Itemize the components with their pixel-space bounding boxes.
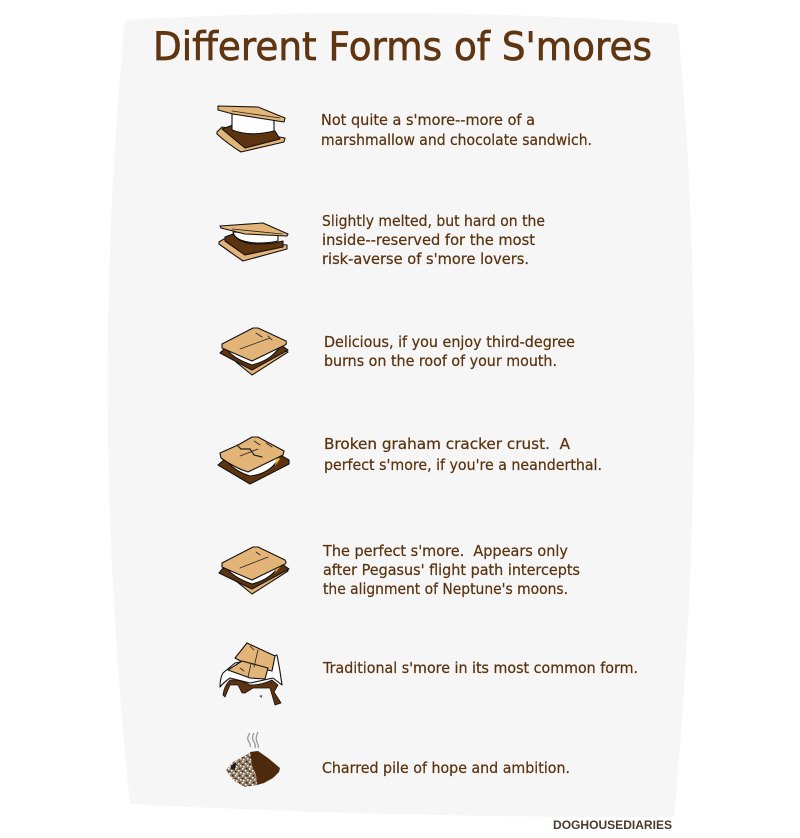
background panel: [108, 13, 694, 817]
text: description 2: [322, 212, 545, 268]
text: description 4: perfect s'more, if you're a neanderthal.: [324, 456, 602, 474]
icon: broken cracker s'more: [218, 437, 289, 484]
text: description 5: [322, 542, 580, 598]
title: Different Forms of S'mores: [153, 25, 652, 70]
text: description 6: Traditional s'more in its most common form.: [322, 659, 638, 677]
text: description 2: risk-averse of s'more lovers.: [322, 250, 529, 268]
text: description 2: inside--reserved for the most: [322, 231, 535, 249]
text: description 7: Charred pile of hope and ambition.: [322, 759, 570, 777]
text: description 2: Slightly melted, but hard on the: [322, 212, 545, 230]
icon: perfect s'more: [219, 547, 289, 594]
text: description 5: the alignment of Neptune's moons.: [323, 580, 568, 598]
text: description 3: [324, 333, 575, 370]
text: description 1: Not quite a s'more--more of a: [321, 111, 535, 129]
text: description 1: marshmallow and chocolate sandwich.: [321, 131, 592, 149]
steam: [248, 732, 258, 748]
icon: melted collapsed s'more: [220, 643, 282, 705]
icon: stacked s'more, unmelted: [217, 106, 285, 152]
text: description 4: [324, 435, 602, 474]
text: description 4: Broken graham cracker crust. A: [324, 435, 570, 453]
text: description 1: [321, 111, 592, 149]
credit: DOGHOUSEDIARIES: [553, 818, 672, 832]
text: description 5: The perfect s'more. Appears only: [322, 542, 568, 560]
icon: charred pile: [226, 732, 280, 787]
text: description 3: burns on the roof of your mouth.: [324, 352, 557, 370]
icon: gooey s'more: [220, 328, 288, 375]
text: description 3: Delicious, if you enjoy third-degree: [324, 333, 575, 351]
text: description 5: after Pegasus' flight path intercepts: [323, 561, 580, 579]
icon: slightly melted s'more: [219, 223, 288, 261]
